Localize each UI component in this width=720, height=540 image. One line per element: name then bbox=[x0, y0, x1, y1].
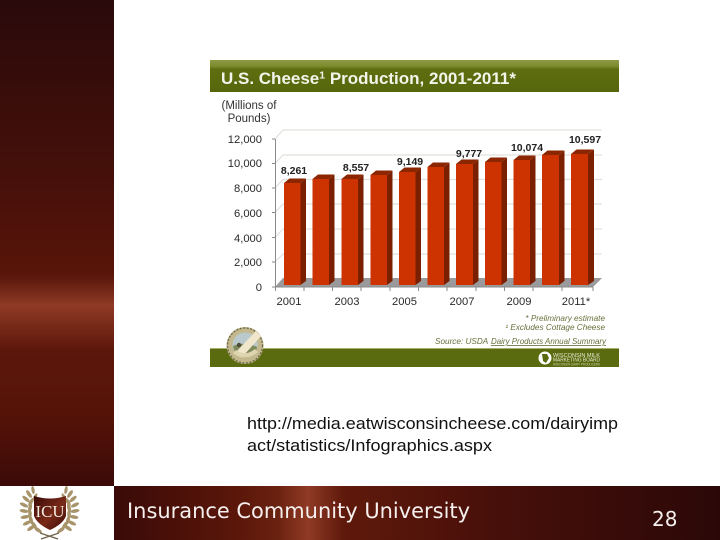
footnotes: Dairy Products Annual Summary bbox=[491, 337, 607, 346]
y axis bbox=[228, 134, 593, 294]
y axis: 12,000 bbox=[228, 134, 262, 146]
x axis year labels bbox=[277, 296, 591, 308]
value labels: 8,557 bbox=[343, 162, 369, 174]
axis unit label bbox=[222, 100, 277, 125]
source URL text: http://media.eatwisconsincheese.com/dairyimp bbox=[247, 414, 618, 433]
x axis year labels: 2007 bbox=[450, 296, 474, 308]
value labels: 10,597 bbox=[569, 134, 601, 146]
icon: ICU crest logo: ICU bbox=[36, 502, 64, 521]
shield bbox=[34, 496, 66, 530]
axis unit label: Pounds) bbox=[228, 113, 271, 125]
value labels: 9,777 bbox=[456, 148, 482, 160]
Wisconsin Milk Marketing Board logo bbox=[538, 352, 601, 366]
footnotes: * Preliminary estimate bbox=[525, 314, 605, 323]
bottom green bar bbox=[210, 348, 619, 367]
icon: Wisconsin cheese seal bbox=[226, 327, 264, 364]
icon: ICU crest logo bbox=[19, 486, 80, 539]
footer title: Insurance Community University bbox=[127, 499, 470, 523]
source URL text: act/statistics/Infographics.aspx bbox=[247, 436, 493, 455]
y axis: 0 bbox=[256, 282, 262, 294]
axis unit label: (Millions of bbox=[222, 100, 277, 112]
plot background bbox=[275, 130, 602, 287]
value labels: 9,149 bbox=[397, 156, 423, 168]
source URL text bbox=[247, 414, 618, 455]
x axis year labels: 2011* bbox=[562, 296, 591, 308]
y axis: 4,000 bbox=[234, 233, 262, 245]
header bar bbox=[210, 60, 619, 92]
Wisconsin Milk Marketing Board logo: WISCONSIN MILK bbox=[553, 353, 601, 359]
y axis: 8,000 bbox=[234, 183, 262, 195]
bars bbox=[284, 150, 594, 285]
y axis: 6,000 bbox=[234, 208, 262, 220]
left sidebar bbox=[0, 0, 114, 486]
x axis year labels: 2005 bbox=[392, 296, 417, 308]
chart image bbox=[210, 60, 619, 367]
value labels bbox=[281, 134, 601, 177]
footnotes: ¹ Excludes Cottage Cheese bbox=[505, 323, 605, 332]
value labels: 10,074 bbox=[511, 142, 543, 154]
header bar: U.S. Cheese bbox=[221, 69, 319, 88]
page number: 28 bbox=[652, 507, 677, 531]
header bar: Production, 2001-2011* bbox=[325, 69, 516, 88]
x axis year labels: 2003 bbox=[335, 296, 359, 308]
x axis year labels: 2001 bbox=[277, 296, 301, 308]
Wisconsin Milk Marketing Board logo: WISCONSIN DAIRY PRODUCERS bbox=[553, 362, 600, 366]
footnotes bbox=[435, 314, 607, 346]
x axis year labels: 2009 bbox=[507, 296, 531, 308]
value labels: 8,261 bbox=[281, 165, 307, 177]
wreath bbox=[19, 486, 80, 534]
Wisconsin Milk Marketing Board logo: MARKETING BOARD bbox=[553, 358, 600, 364]
footer bar bbox=[114, 486, 720, 540]
y axis: 2,000 bbox=[234, 257, 262, 269]
footnotes: Source: USDA bbox=[435, 337, 489, 346]
y axis: 10,000 bbox=[228, 158, 262, 170]
header bar: 1 bbox=[319, 70, 325, 82]
